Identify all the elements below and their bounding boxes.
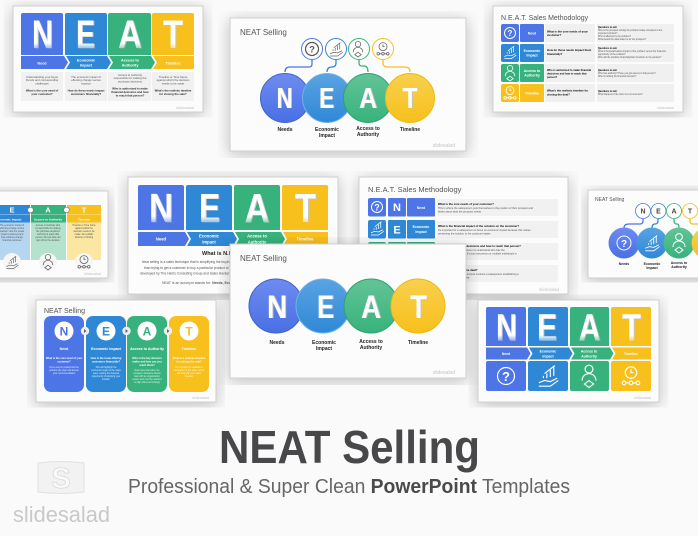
- slide: What is NEAT blocks: than trying to get a customer to buy a particular product or: [144, 266, 230, 270]
- slide: NEAT Selling small circles (right edge): Impact: [646, 266, 658, 270]
- slide: NEAT blocks with text: A: [118, 13, 142, 57]
- slide: NEAT Selling circles with icons: NEAT Selling: [240, 28, 287, 37]
- slide: NEAT blocks with text: Impact: [80, 64, 93, 68]
- slide: NEAT Selling small circles (right edge): Authority: [671, 265, 687, 269]
- slide: NEAT blocks with text: purchase decisions: [118, 80, 143, 84]
- slide: What is NEAT blocks: N: [150, 186, 174, 232]
- slide: NEAT Selling columns: opportunity of adopting your: [92, 375, 120, 378]
- slide: What is NEAT blocks: NEAT is an acronym stands for: Needs, Economic: [162, 281, 241, 285]
- slide: NEAT Selling circles with icons: Economic: [315, 127, 339, 133]
- slide: NEAT Selling columns: [36, 300, 216, 402]
- slide: NEAT Selling small circles (right edge): E: [656, 208, 661, 216]
- slide: NEAT Selling small circles (right edge): N: [640, 208, 646, 216]
- slide: N.E.A.T. Sales Methodology table: Who is authorized to make financial: [547, 68, 591, 72]
- slide: NEAT Selling columns: will help with your sales: [177, 372, 202, 375]
- slide: N.E.A.T. Sales Methodology table: Economic: [524, 49, 540, 53]
- slide: What is NEAT blocks: T: [296, 186, 317, 232]
- slide: N.E.A.T. Sales Methodology rows: timeline for closing the sale.: [438, 276, 470, 280]
- slide: N.E.A.T. Sales Methodology rows: ?: [374, 202, 380, 212]
- slide: N.E.A.T. Sales Methodology table: How do these needs impact them: [547, 48, 592, 52]
- slide: cropped three-column table (left edge): sign off on the decision: [36, 239, 60, 242]
- slide: cropped three-column table (left edge): E: [9, 206, 15, 214]
- slide: NEAT Selling columns: Timeline: [182, 347, 196, 351]
- slide: What is NEAT blocks: A: [246, 186, 270, 232]
- slide: cropped three-column table (left edge): impact customers and: [1, 233, 24, 236]
- slide: NEAT Selling columns: It's important to establish a: [175, 366, 203, 369]
- slide: N.E.A.T. Sales Methodology rows: Without an exact selling process involves a salesperson establishing a: [438, 272, 519, 276]
- slide: NEAT blocks with icon row: N: [496, 308, 517, 350]
- slide: NEAT Selling circles with icons: Access to: [356, 126, 380, 132]
- slide: What is NEAT blocks: Neat selling is a sales technique that is simplifying the buying: [142, 260, 231, 264]
- slide: NEAT blocks with text: T: [163, 13, 183, 57]
- slide: NEAT Selling circles front: Needs: [269, 340, 285, 346]
- slide: NEAT blocks with text: Authority: [122, 64, 139, 68]
- slide: NEAT blocks with text: challenges: [35, 82, 49, 86]
- slide: NEAT blocks with text: for closing the sale?: [159, 92, 187, 96]
- slide: NEAT blocks with icon row: Timeline: [624, 352, 638, 356]
- slide: NEAT Selling circles front: Impact: [316, 346, 332, 352]
- slide: NEAT Selling circles front: E: [318, 289, 335, 325]
- slide: NEAT blocks with icon row: E: [538, 308, 558, 350]
- slide: NEAT Selling circles with icons: Timeline: [400, 127, 420, 133]
- slide: N.E.A.T. Sales Methodology table: proposed solution?: [598, 32, 618, 35]
- slide: What is NEAT blocks: Need: [156, 236, 167, 242]
- slide: cropped three-column table (left edge): The economic impact of: [0, 224, 25, 227]
- slide: cropped three-column table (left edge): financial outcomes: [2, 239, 22, 242]
- slide: NEAT blocks with text: Timeline: [165, 62, 181, 66]
- slide: NEAT Selling columns: solution: [102, 378, 111, 381]
- slide: NEAT Selling small circles (right edge): Access to: [671, 261, 687, 265]
- slide: NEAT Selling circles with icons: T: [402, 83, 418, 115]
- slide: NEAT blocks with text: inaction: [81, 82, 91, 86]
- slide: NEAT blocks with text: [13, 6, 203, 112]
- slide: NEAT blocks with icon row: slidesalad: [634, 396, 651, 400]
- slide: NEAT blocks with text: A: [119, 14, 143, 58]
- slide: NEAT blocks with icon row: A: [578, 308, 600, 350]
- slide: What is NEAT blocks: Economic: [199, 234, 220, 238]
- slide: What is NEAT blocks: E: [199, 185, 220, 231]
- slide: NEAT blocks with icon row: E: [537, 308, 557, 350]
- slide: NEAT Selling circles with icons: N: [278, 83, 294, 115]
- slide: NEAT Selling circles with icons: A: [359, 83, 377, 115]
- slide: NEAT blocks with icon row: N: [497, 308, 518, 350]
- slide: NEAT Selling columns: A: [143, 324, 152, 338]
- slide: NEAT blocks with text: customers financially?: [71, 92, 101, 96]
- slide: N.E.A.T. Sales Methodology rows: What is the core needs of your customer?: [438, 202, 494, 206]
- slide: N.E.A.T. Sales Methodology table: N.E.A.T. Sales Methodology: [501, 15, 589, 22]
- slide: NEAT Selling columns: Access to Authority: [130, 347, 164, 351]
- slide: cropped three-column table (left edge): decision needs to be: [73, 230, 95, 233]
- slide: NEAT Selling circles front: N: [267, 289, 287, 325]
- slide: NEAT Selling columns: slidesalad: [192, 396, 209, 400]
- slide: What is NEAT blocks: A: [244, 185, 270, 231]
- slide: NEAT Selling columns: start with an organization: [134, 375, 160, 378]
- slide: NEAT blocks with icon row: Access to: [581, 350, 597, 354]
- logo: slidesalad: S: [51, 463, 71, 495]
- slide: NEAT blocks with text: Economic: [77, 58, 95, 62]
- slide: NEAT Selling columns: reach them?: [139, 363, 155, 367]
- slide: NEAT blocks with text: E: [76, 13, 95, 57]
- slide: N.E.A.T. Sales Methodology rows: N.E.A.T. Sales Methodology: [368, 185, 462, 194]
- slide: NEAT blocks with text: Access to: [121, 58, 140, 62]
- slide: cropped three-column table (left edge): [0, 191, 108, 278]
- slide: NEAT Selling circles front: E: [317, 289, 334, 325]
- slide: NEAT Selling columns: customers financially?: [92, 360, 120, 364]
- subtitle: Professional & Super Clean PowerPoint Templates: [128, 475, 570, 498]
- slide: NEAT blocks with text: N: [32, 13, 53, 57]
- slide: NEAT blocks with text: financial decisions and how: [111, 90, 149, 94]
- slide: NEAT Selling columns: problem the client will accept: [49, 369, 79, 372]
- slide: NEAT blocks with text: effecting change versus: [71, 78, 101, 82]
- slide: NEAT Selling circles front: T: [410, 289, 427, 325]
- slide: N.E.A.T. Sales Methodology rows: presenting the solution to the customer easier.: [438, 232, 491, 236]
- slide: NEAT Selling circles front: Access to: [359, 339, 383, 345]
- slide: N.E.A.T. Sales Methodology table: What happens if the client is a not success?: [598, 93, 643, 96]
- slide: NEAT Selling circles with icons: N: [276, 83, 292, 115]
- slide: NEAT blocks with text: How do these needs impact: [68, 88, 104, 92]
- slide: NEAT blocks with icon row: Economic: [540, 350, 556, 354]
- slide: What is NEAT blocks: Access to: [247, 234, 267, 238]
- slide: NEAT Selling circles front: N: [268, 289, 288, 325]
- slide: N.E.A.T. Sales Methodology table: [493, 6, 683, 112]
- slide: N.E.A.T. Sales Methodology table: Questions to ask:: [598, 47, 618, 50]
- slide: N.E.A.T. Sales Methodology rows: It's important for a salesperson to focus on economic impact because this makes: [438, 228, 531, 232]
- slide: N.E.A.T. Sales Methodology table: opportunity of the solution?: [598, 53, 626, 56]
- slide: NEAT Selling circles with icons: E: [319, 83, 334, 115]
- slide: N.E.A.T. Sales Methodology table: Who is holding the financial decision?: [598, 75, 637, 78]
- slide: NEAT blocks with text: Timeline or Time frame: [159, 75, 188, 79]
- slide: NEAT blocks with text: against which the decision: [157, 78, 190, 82]
- slide: NEAT Selling circles front: A: [361, 289, 381, 325]
- slide: NEAT blocks with icon row: T: [623, 308, 642, 350]
- slide: N.E.A.T. Sales Methodology table: financially?: [547, 52, 563, 56]
- slide: NEAT blocks with icon row: Need: [502, 352, 510, 356]
- slide: cropped three-column table (left edge): A: [45, 206, 51, 214]
- slide: NEAT blocks with text: slidesalad: [176, 105, 194, 110]
- slide: NEAT Selling circles with icons: Needs: [277, 127, 293, 133]
- slide: NEAT blocks with icon row: Impact: [542, 354, 554, 358]
- slide: NEAT Selling columns: T: [185, 324, 193, 338]
- slide: cropped three-column table (left edge): made: the realistic: [75, 233, 94, 236]
- slide: NEAT Selling columns: economic impact of the sales: [91, 369, 122, 372]
- slide: NEAT Selling columns: forecast: [185, 375, 193, 378]
- slide: NEAT blocks with text: E: [77, 14, 96, 58]
- slide: NEAT Selling columns: team, setting the financial: [93, 372, 120, 375]
- slide: N.E.A.T. Sales Methodology table: Questions to ask:: [598, 26, 618, 29]
- slide: NEAT blocks with text: The economic impact of: [71, 75, 101, 79]
- slide: cropped three-column table (left edge): effecting change versus: [0, 227, 25, 230]
- slide: N.E.A.T. Sales Methodology rows: authority to buy, whether it's just one person or multiple individuals in: [438, 252, 517, 256]
- slide: N.E.A.T. Sales Methodology table: Need: [528, 32, 536, 36]
- slide: N.E.A.T. Sales Methodology rows: This is where the salesperson puts themselves in the position of their prospect and: [438, 206, 533, 210]
- slide: NEAT Selling columns: N: [60, 324, 68, 338]
- slide: NEAT Selling columns: for closing the sale?: [176, 360, 202, 364]
- slide: cropped three-column table (left edge): Timeline: [78, 218, 90, 222]
- slide: NEAT Selling circles front: [230, 244, 466, 378]
- slide: NEAT Selling columns: Economic Impact: [91, 347, 122, 351]
- slide: N.E.A.T. Sales Methodology rows: [359, 177, 568, 294]
- slide: What is NEAT blocks: T: [295, 185, 316, 231]
- slide: NEAT Selling circles front: slidesalad: [433, 370, 455, 376]
- slide: NEAT Selling circles with icons: Authority: [357, 132, 379, 138]
- slide: N.E.A.T. Sales Methodology table: How is the prospect solving the problem today compared to the: [598, 29, 663, 32]
- slide: N.E.A.T. Sales Methodology table: decisions and how to reach that: [547, 72, 587, 76]
- slide: NEAT blocks with text: needs to be made: [162, 82, 185, 86]
- slide: N.E.A.T. Sales Methodology rows: Impact: [415, 230, 427, 234]
- slide: NEAT blocks with text: Access to Authority: [118, 73, 142, 77]
- slide: NEAT blocks with text: What is the core need of: [26, 88, 58, 92]
- slide: What is NEAT blocks: developed by The Harris Consulting Group and Sales Hacker to: [140, 272, 233, 276]
- slide: cropped three-column table (left edge): timeline of closing: [75, 236, 94, 239]
- slide: N.E.A.T. Sales Methodology table: Who has authority? Have you got access to that person?: [598, 72, 656, 75]
- slide: N.E.A.T. Sales Methodology rows: thinks about what the prospect needs.: [438, 210, 482, 214]
- slide: NEAT Selling columns: prospect, decisions should: [133, 372, 161, 375]
- slide: N.E.A.T. Sales Methodology table: What is the core needs of your: [547, 30, 589, 34]
- slide: NEAT Selling columns: timeframe for the sales, which: [174, 369, 205, 372]
- slide: NEAT Selling columns: your recommendation: [53, 372, 76, 375]
- slide: What is NEAT blocks: [128, 177, 338, 294]
- slide: NEAT blocks with text: Need: [37, 62, 47, 66]
- slide: NEAT blocks with icon row: ?: [502, 369, 510, 384]
- slide: N.E.A.T. Sales Methodology table: Timeline: [525, 92, 539, 96]
- slide: N.E.A.T. Sales Methodology table: Who will the prioritize financially/their functions in the solution?: [598, 56, 662, 59]
- slide: NEAT blocks with text: friends and corresponding: [26, 78, 59, 82]
- slide: NEAT Selling circles with icons: A: [360, 83, 378, 115]
- slide: N.E.A.T. Sales Methodology table: closing the deal?: [547, 92, 570, 96]
- slide: What is NEAT blocks: Authority: [248, 240, 267, 244]
- slide: NEAT blocks with icon row: A: [580, 308, 602, 350]
- slide: N.E.A.T. Sales Methodology table: What is financial/market impact of the problem versus the financial: [598, 50, 666, 53]
- slide: NEAT Selling small circles (right edge): [588, 190, 698, 278]
- slide: cropped three-column table (left edge): against which the: [75, 227, 94, 230]
- slide: NEAT Selling circles front: T: [411, 289, 428, 325]
- slide: N.E.A.T. Sales Methodology table: Questions to ask:: [598, 90, 618, 93]
- slide: N.E.A.T. Sales Methodology rows: E: [393, 224, 401, 236]
- slide: NEAT blocks with text: N: [33, 14, 54, 58]
- slide: NEAT Selling columns: maker and how can you: [132, 360, 162, 364]
- slide: NEAT blocks with text: responsible for making the: [114, 76, 147, 80]
- slide: cropped three-column table (left edge): Access to Authority: [34, 218, 62, 222]
- slide: NEAT Selling columns: Need: [60, 347, 68, 351]
- slide: NEAT blocks with text: to reach that person?: [116, 94, 145, 98]
- slide: N.E.A.T. Sales Methodology table: ?: [508, 29, 513, 38]
- slide: NEAT blocks with text: What's the realistic timeline: [155, 88, 192, 92]
- slide: NEAT Selling circles with icons: Impact: [319, 133, 335, 139]
- slide: NEAT Selling small circles (right edge): Economic: [644, 262, 660, 266]
- slide: N.E.A.T. Sales Methodology table: Authority: [524, 74, 540, 78]
- slide: N.E.A.T. Sales Methodology table: slidesalad: [657, 106, 674, 110]
- slide: NEAT blocks with text: Understanding your buyer: [26, 75, 58, 79]
- slide: N.E.A.T. Sales Methodology table: Questions to ask:: [598, 69, 618, 72]
- slide: NEAT Selling circles front: A: [362, 289, 382, 325]
- slide: N.E.A.T. Sales Methodology rows: Need: [417, 206, 425, 210]
- logo: slidesalad: slidesalad: [13, 502, 110, 527]
- slide: NEAT Selling columns: NEAT Selling: [44, 308, 85, 315]
- slide: NEAT Selling columns: customer?: [57, 360, 71, 364]
- slide: N.E.A.T. Sales Methodology table: What's the realistic timeline for: [547, 88, 589, 92]
- slide: NEAT blocks with icon row: T: [622, 308, 641, 350]
- slide: NEAT blocks with text: Who is authorized to make: [112, 86, 148, 90]
- slide: NEAT Selling circles front: Economic: [312, 340, 336, 346]
- slide: NEAT Selling columns: What is a realistic timeline: [173, 356, 206, 360]
- slide: N.E.A.T. Sales Methodology rows: Economic: [413, 225, 429, 229]
- slide: NEAT Selling circles front: NEAT Selling: [240, 254, 287, 263]
- slide: cropped three-column table (left edge): slidesalad: [84, 272, 101, 276]
- slide: cropped three-column table (left edge): Timeline or Time frame: [72, 224, 96, 227]
- slide: N.E.A.T. Sales Methodology rows: It's important for a salesperson to understand who has the: [438, 248, 505, 252]
- slide: cropped three-column table (left edge): person: find out who can: [35, 236, 61, 239]
- slide: NEAT Selling circles front: Authority: [360, 345, 382, 351]
- slide: cropped three-column table (left edge): and how to reach that: [37, 233, 59, 236]
- logo: slidesalad: [13, 462, 110, 527]
- slide: NEAT Selling small circles (right edge): Needs: [619, 262, 629, 266]
- slide: NEAT Selling small circles (right edge): T: [688, 208, 693, 216]
- slide: cropped three-column table (left edge): T: [82, 206, 87, 214]
- slide: NEAT Selling columns: What is the core need of your: [46, 356, 82, 360]
- slide: N.E.A.T. Sales Methodology table: Impact: [526, 54, 538, 58]
- slide: NEAT Selling columns: Who is the key decision: [132, 356, 162, 360]
- slide: N.E.A.T. Sales Methodology table: person?: [547, 75, 558, 79]
- slide: N.E.A.T. Sales Methodology rows: Timeline for closing the deal?: [438, 268, 478, 272]
- slide: cropped three-column table (left edge): Access to Authority who: [36, 224, 61, 227]
- slide: NEAT Selling circles with icons: E: [320, 83, 335, 115]
- title: NEAT Selling: [219, 421, 480, 473]
- slide: N.E.A.T. Sales Methodology rows: slidesalad: [539, 287, 559, 292]
- slide: N.E.A.T. Sales Methodology table: Who is affected by the problem?: [598, 35, 632, 38]
- slide: NEAT blocks with icon row: [478, 300, 659, 402]
- slide: N.E.A.T. Sales Methodology rows: Who makes financial decisions and how to reach that person?: [438, 244, 521, 248]
- slide: NEAT Selling circles front: Timeline: [408, 340, 428, 346]
- slide: cropped three-column table (left edge): inaction: how the needs: [0, 230, 25, 233]
- slide: NEAT Selling columns: This will highlight the: [95, 366, 117, 369]
- slide: N.E.A.T. Sales Methodology table: What would the ideal state be for the prospect?: [598, 38, 647, 41]
- slide: What is NEAT blocks: Timeline: [297, 236, 314, 242]
- slide: What is NEAT blocks: Impact: [202, 240, 216, 244]
- slide: NEAT blocks with text: T: [164, 14, 184, 58]
- slide: NEAT Selling circles with icons: ?: [309, 44, 315, 56]
- slide: NEAT Selling columns: to align offers accordingly: [134, 381, 161, 384]
- slide: N.E.A.T. Sales Methodology table: customer?: [547, 33, 562, 37]
- slide: NEAT Selling columns: reason and must be reached: [132, 378, 162, 381]
- slide: NEAT Selling circles with icons: slidesalad: [433, 143, 455, 149]
- slide: NEAT Selling small circles (right edge): NEAT Selling: [595, 197, 624, 203]
- slide: N.E.A.T. Sales Methodology table: Access to: [524, 69, 540, 73]
- slide: NEAT blocks with text: your customer?: [31, 92, 53, 96]
- slide: N.E.A.T. Sales Methodology rows: What is the financial impact of the solution on the customer?: [438, 224, 519, 228]
- slide: NEAT Selling circles with icons: [230, 18, 466, 151]
- slide: What is NEAT blocks: What is N.E.A.T.?: [202, 251, 248, 257]
- slide: cropped three-column table (left edge): is responsible for making: [35, 227, 61, 230]
- slide: NEAT Selling columns: Determine that when the: [134, 369, 160, 372]
- slide: What is NEAT blocks: E: [200, 186, 221, 232]
- slide: NEAT Selling small circles (right edge): ?: [621, 239, 627, 250]
- slide: NEAT blocks with icon row: Authority: [581, 354, 597, 358]
- slide: cropped three-column table (left edge): the purchase decisions: [36, 230, 61, 233]
- slide: NEAT Selling columns: How is the issue offering: [91, 356, 122, 360]
- slide: N.E.A.T. Sales Methodology rows: N: [393, 202, 401, 214]
- slide: NEAT Selling columns: Once need is understood the: [49, 366, 79, 369]
- slide: NEAT Selling small circles (right edge): A: [671, 208, 677, 216]
- slide: What is NEAT blocks: N: [149, 185, 173, 231]
- slide: NEAT Selling circles with icons: T: [404, 83, 419, 115]
- slide: NEAT Selling columns: E: [102, 324, 110, 338]
- slide: cropped three-column table (left edge): how solutions change: [1, 236, 24, 239]
